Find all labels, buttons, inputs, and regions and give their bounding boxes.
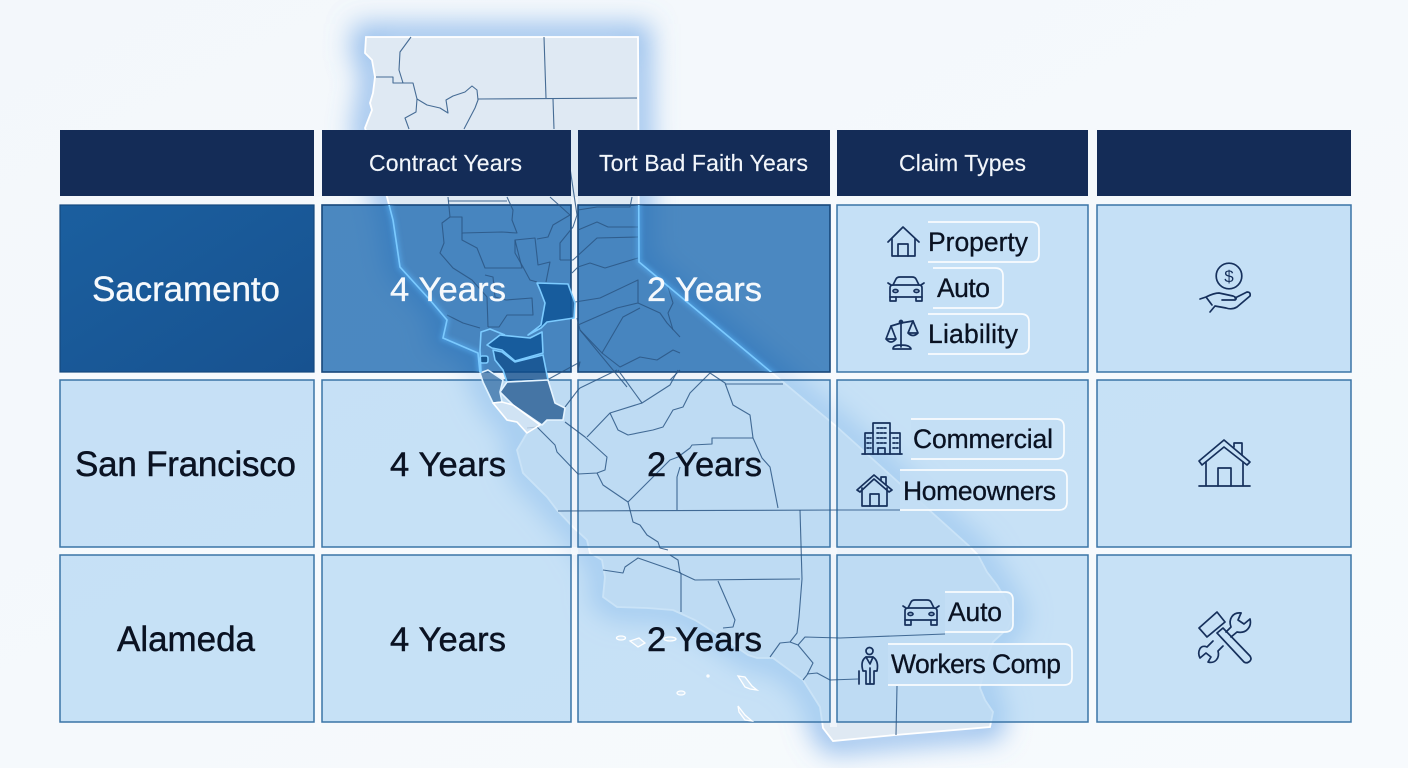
row: San Francisco cells <box>60 380 1351 547</box>
contract years values: 4 Years <box>390 271 506 309</box>
contract years values: 4 Years <box>390 621 506 659</box>
map: California state base <box>365 37 1013 741</box>
icon: house <box>888 227 919 256</box>
chip: Liability <box>928 314 1029 354</box>
map: channel islands <box>616 636 757 721</box>
chip: Commercial <box>911 419 1064 459</box>
chip: Property: Property <box>928 227 1029 257</box>
chip: Auto <box>945 592 1013 632</box>
icon: hand holding coin <box>1200 263 1250 312</box>
chip: Workers Comp: Workers Comp <box>891 649 1061 679</box>
header: Claim Types: Claim Types <box>899 150 1026 176</box>
contract years values: 4 Years <box>390 446 506 484</box>
table body cells <box>60 205 1351 722</box>
tort bad faith years values: 2 Years <box>647 621 762 659</box>
county: Contra Costa and Alameda <box>493 350 548 382</box>
chip: Liability: Liability <box>928 319 1019 349</box>
claim types: Sacramento <box>886 222 1039 354</box>
chip: Commercial: Commercial <box>913 424 1053 454</box>
chip: Auto: Auto <box>948 597 1002 627</box>
row label: San Francisco: San Francisco <box>75 445 296 484</box>
chip: Workers Comp <box>888 644 1072 685</box>
claim types: San Francisco <box>857 419 1067 510</box>
county: Marin outline <box>480 329 505 373</box>
county: Sacramento <box>528 283 575 335</box>
table header row <box>60 130 1351 196</box>
icon: home with chimney <box>857 475 892 506</box>
header: Tort Bad Faith Years <box>578 130 830 196</box>
tort bad faith years values: 2 Years <box>647 446 762 484</box>
icon: worker <box>859 648 878 684</box>
header: Contract Years <box>322 130 571 196</box>
claim types: Alameda <box>859 592 1072 685</box>
header: empty first column <box>60 130 314 196</box>
county: San Francisco <box>480 356 488 363</box>
chip: Auto <box>933 268 1003 308</box>
tort bad faith years values <box>647 271 762 659</box>
icon: hand holding coin: $ <box>1224 267 1234 286</box>
icon: office buildings <box>862 423 902 454</box>
county: Santa Clara <box>500 380 565 425</box>
row label: Alameda: Alameda <box>117 620 256 659</box>
icon: hammer and wrench <box>1199 612 1251 663</box>
county: San Mateo peninsula <box>480 370 503 403</box>
row: Sacramento cells <box>60 205 1351 372</box>
table gutters <box>60 197 1351 727</box>
row: Alameda cells <box>60 555 1351 722</box>
county: Santa Cruz <box>493 402 540 433</box>
header: Contract Years: Contract Years <box>369 150 522 176</box>
map: county boundary lines <box>376 37 945 735</box>
tort bad faith years values: 2 Years <box>647 271 762 309</box>
icon: house <box>1199 440 1250 486</box>
icon: car <box>888 277 924 301</box>
icon: car <box>903 600 939 625</box>
contract years values <box>390 271 506 659</box>
header: Tort Bad Faith Years: Tort Bad Faith Years <box>599 150 808 176</box>
map: highlighted bay area counties <box>480 283 575 433</box>
chip: Homeowners: Homeowners <box>903 476 1056 506</box>
row label: Sacramento: Sacramento <box>92 270 280 309</box>
header: empty last column <box>1097 130 1351 196</box>
county: Solano <box>487 332 543 361</box>
icon: scales <box>886 320 918 349</box>
map: glowing coastline in Sacramento row <box>384 205 778 372</box>
header: Claim Types <box>837 130 1088 196</box>
chip: Homeowners <box>900 470 1067 510</box>
chip: Property <box>928 222 1039 262</box>
chip: Auto: Auto <box>937 273 990 303</box>
